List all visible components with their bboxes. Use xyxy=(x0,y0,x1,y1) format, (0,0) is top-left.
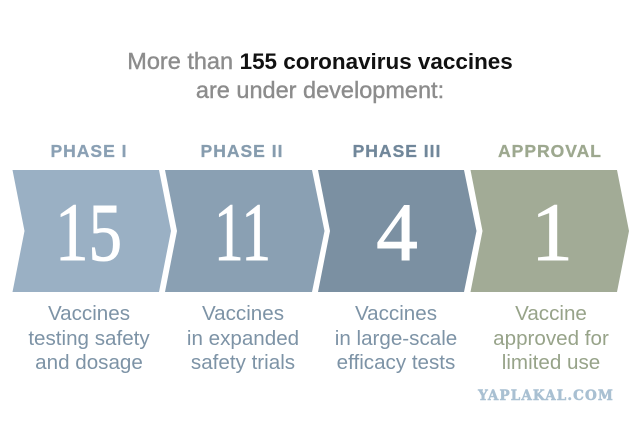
chevron: Phase III, 4 xyxy=(318,170,476,292)
phase label: Phase I: PHASE I xyxy=(50,141,128,161)
phase label: Phase II: PHASE II xyxy=(201,141,283,161)
description: Approval: approved for xyxy=(493,326,609,350)
description: Phase I: testing safety xyxy=(28,326,150,350)
watermark: YAPLAKAL.COM xyxy=(478,388,614,404)
title: More than 155 coronavirus vaccines xyxy=(127,48,513,74)
description: Phase II: in expanded xyxy=(187,326,299,350)
chevron: Approval, 1: 1 xyxy=(531,186,573,278)
description: Phase I: Vaccines xyxy=(48,302,130,325)
phase label: Phase III: PHASE III xyxy=(353,141,441,161)
description: Phase III: Vaccines xyxy=(355,302,437,325)
chevron: Approval, 1 xyxy=(470,170,629,292)
description: Phase III: efficacy tests xyxy=(337,351,455,374)
description: Phase III xyxy=(335,302,457,374)
description: Approval: Vaccine xyxy=(515,302,587,325)
chevron: Phase III, 4: 4 xyxy=(376,186,418,278)
chevron: Phase II, 11 xyxy=(165,170,324,292)
description: Approval: limited use xyxy=(502,351,600,374)
title xyxy=(127,48,513,104)
description: Phase II: safety trials xyxy=(191,351,295,374)
chevron: Phase II, 11: 11 xyxy=(214,186,271,278)
description: Phase II: Vaccines xyxy=(202,302,284,325)
phase label: Approval: APPROVAL xyxy=(498,141,602,161)
description: Phase III: in large-scale xyxy=(335,326,457,350)
title: are under development: xyxy=(196,77,444,103)
chevron: Phase I, 15 xyxy=(12,170,171,292)
description: Phase I xyxy=(28,302,150,374)
description: Phase II xyxy=(187,302,299,374)
description: Phase I: and dosage xyxy=(35,351,143,374)
chevron: Phase I, 15: 15 xyxy=(55,186,122,278)
description: Approval xyxy=(493,302,609,374)
